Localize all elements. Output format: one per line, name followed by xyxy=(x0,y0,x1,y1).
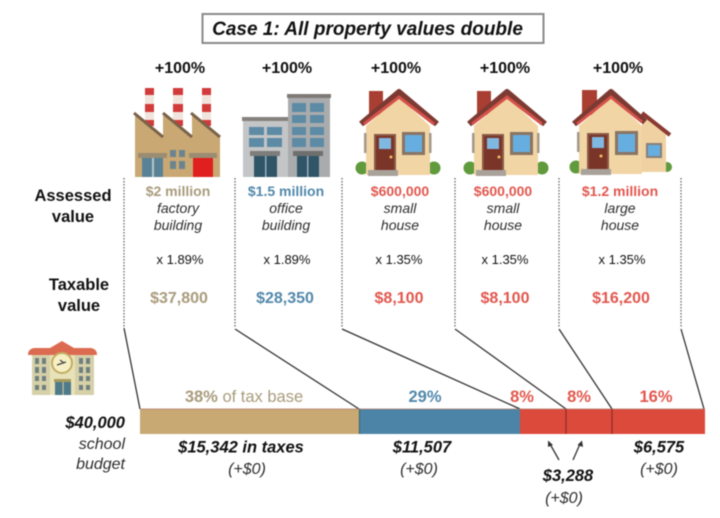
bar percentage labels: 8% xyxy=(567,388,591,406)
taxable values row xyxy=(150,290,650,307)
tax amount: office: (+$0) xyxy=(400,461,438,478)
icon: factory xyxy=(134,88,220,177)
taxable values row: $28,350 xyxy=(256,290,314,307)
property: small house 2: small xyxy=(487,200,520,216)
assessed value label: value xyxy=(52,208,94,226)
bar percentage labels: 16% xyxy=(639,388,673,406)
property: small house: small xyxy=(384,200,417,216)
icon: small house xyxy=(356,91,440,176)
school budget label: $40,000 xyxy=(64,414,126,432)
property: small house 2 xyxy=(474,183,532,233)
tax amount: office xyxy=(392,438,452,478)
tax amount: factory: $15,342 in taxes xyxy=(177,438,304,456)
bar percentage labels: 8% xyxy=(510,388,534,406)
percent changes row: +100% xyxy=(262,60,312,77)
tax amount: large house xyxy=(633,438,685,478)
property: office building xyxy=(248,183,324,233)
icon: small house 2 xyxy=(464,91,548,176)
school budget label xyxy=(64,414,126,473)
arrows to small house segments xyxy=(548,440,583,460)
percent changes row: +100% xyxy=(371,60,421,77)
icon: large house xyxy=(570,90,672,175)
tax amount: small houses: (+$0) xyxy=(545,490,583,507)
taxable value label xyxy=(49,276,109,315)
tax amount: office: $11,507 xyxy=(392,438,452,456)
percent changes row: +100% xyxy=(155,60,205,77)
tax rates row: x 1.35% xyxy=(599,252,646,267)
tax amount: small houses xyxy=(542,467,594,507)
bar percentage labels xyxy=(185,388,673,406)
percent changes row xyxy=(155,60,643,77)
taxable value label: value xyxy=(58,297,100,315)
taxable values row: $8,100 xyxy=(481,290,530,307)
property: small house xyxy=(371,183,429,233)
property: small house: $600,000 xyxy=(371,183,429,199)
property: small house 2: $600,000 xyxy=(474,183,532,199)
tax amount: small houses: $3,288 xyxy=(542,467,594,485)
property: factory building xyxy=(146,183,210,233)
property: office building: building xyxy=(262,217,310,233)
tax rates row: x 1.89% xyxy=(264,252,311,267)
icon: office building xyxy=(242,94,331,177)
property: large house: large xyxy=(604,200,636,216)
taxable value label: Taxable xyxy=(49,276,109,294)
property: large house: $1.2 million xyxy=(582,183,658,199)
title xyxy=(202,14,544,43)
title: Case 1: All property values double xyxy=(212,19,523,40)
bar percentage labels: 38% of tax base xyxy=(185,388,303,406)
tax amount: factory: (+$0) xyxy=(228,461,266,478)
tax rates row: x 1.35% xyxy=(482,252,529,267)
property: office building: office xyxy=(269,200,303,216)
leader lines to bar xyxy=(124,328,704,409)
percent changes row: +100% xyxy=(593,60,643,77)
property: large house xyxy=(582,183,658,233)
taxable values row: $16,200 xyxy=(592,290,650,307)
tax amount: large house: (+$0) xyxy=(640,461,678,478)
bar percentage labels: 29% xyxy=(408,388,442,406)
tax amount: large house: $6,575 xyxy=(633,438,685,456)
tax rates row xyxy=(157,252,646,267)
property: factory building: $2 million xyxy=(146,183,210,199)
property: small house: house xyxy=(381,217,419,233)
assessed value label: Assessed xyxy=(34,187,112,205)
tax base stacked bar xyxy=(140,409,705,434)
taxable values row: $37,800 xyxy=(150,290,208,307)
tax rates row: x 1.89% xyxy=(157,252,204,267)
assessed value label xyxy=(34,187,112,226)
school budget label: school xyxy=(79,436,125,453)
taxable values row: $8,100 xyxy=(375,290,424,307)
icon: school xyxy=(28,341,97,395)
column separators: dotted lines xyxy=(124,178,681,328)
property: small house 2: house xyxy=(484,217,522,233)
property: office building: $1.5 million xyxy=(248,183,324,199)
percent changes row: +100% xyxy=(480,60,530,77)
tax rates row: x 1.35% xyxy=(376,252,423,267)
property: factory building: factory xyxy=(157,200,200,216)
tax amount: factory xyxy=(177,438,304,478)
school budget label: budget xyxy=(76,456,126,473)
property: factory building: building xyxy=(154,217,202,233)
property: large house: house xyxy=(601,217,639,233)
